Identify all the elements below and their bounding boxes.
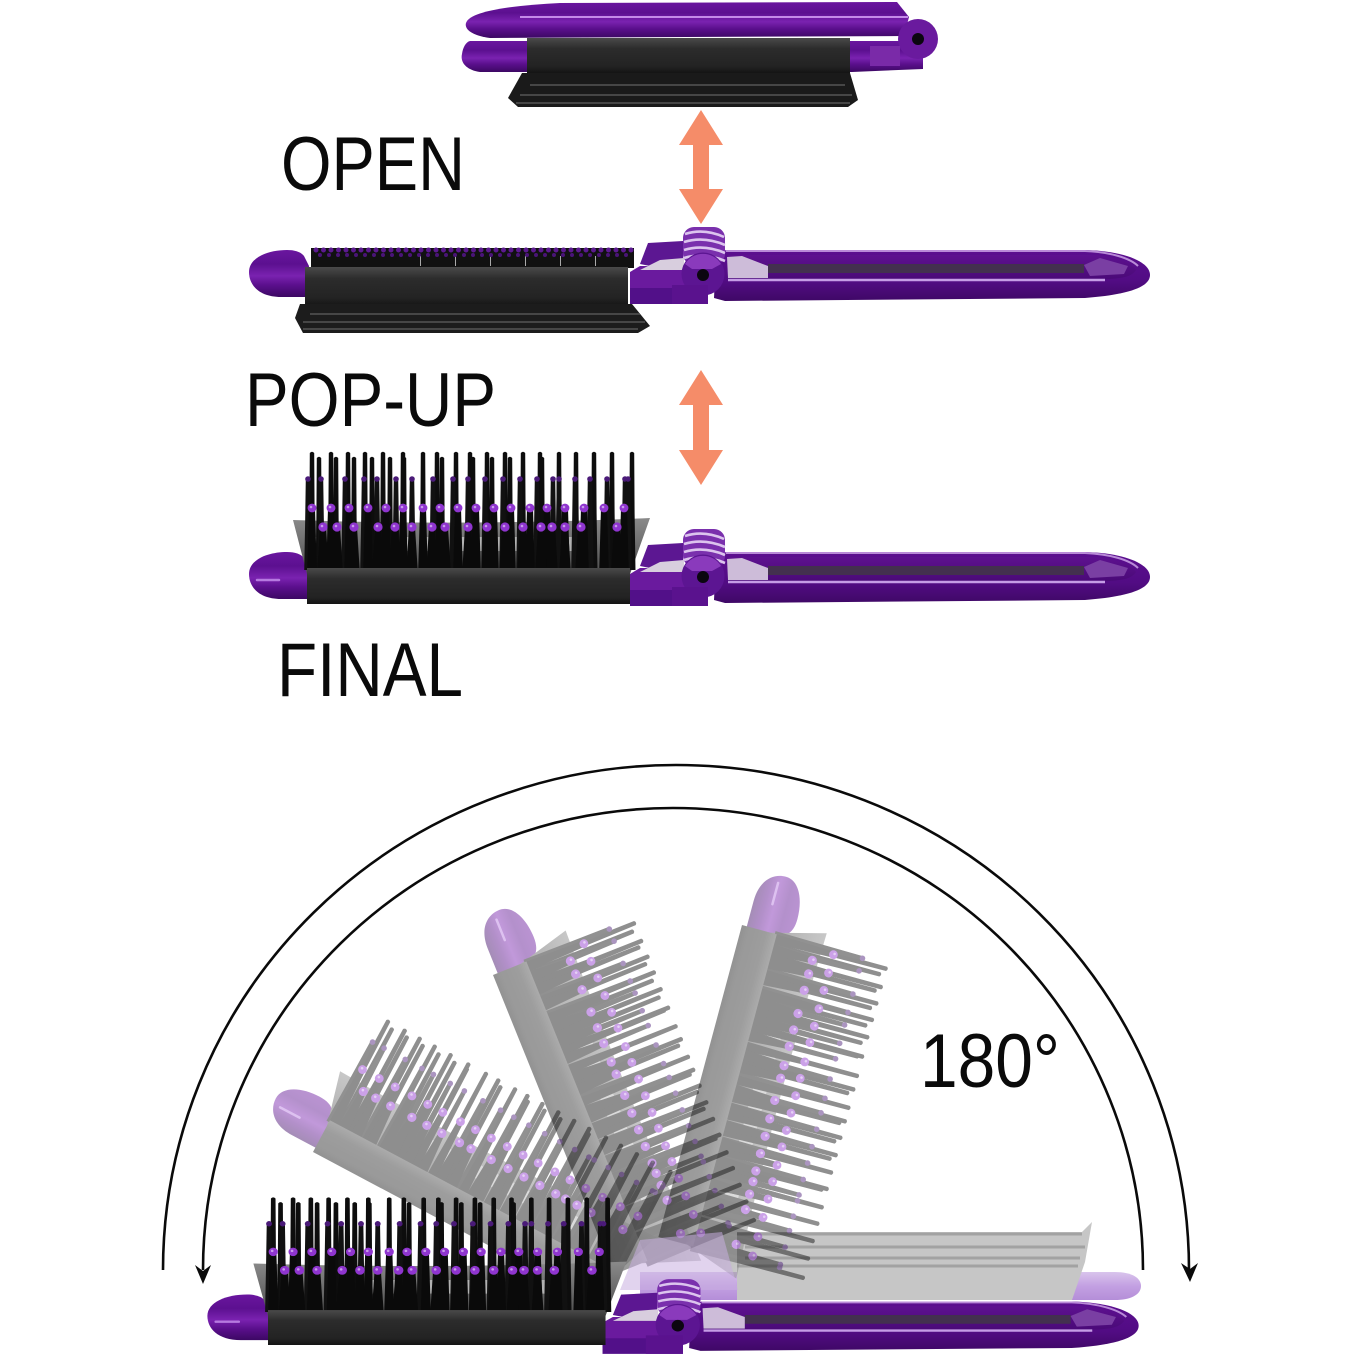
ghost folded plate — [737, 1222, 1092, 1300]
ghost brush: steep right — [653, 869, 904, 1296]
ghost brush: low left — [262, 990, 687, 1313]
rotation arc: inner arrow — [195, 808, 1143, 1284]
brush final: bristles up — [249, 452, 1150, 606]
ghost ridges — [737, 1234, 1085, 1266]
ghost brush: folded flat on right — [640, 1222, 1141, 1300]
right arm and hinge — [630, 529, 1150, 606]
top handle — [466, 2, 909, 38]
brush head with handle — [249, 452, 650, 604]
top handle highlight — [520, 16, 908, 18]
label FINAL: FINAL — [277, 628, 463, 713]
ghost handle — [640, 1272, 1141, 1300]
right arm and hinge — [603, 1279, 1139, 1354]
brush head with handle — [207, 1197, 626, 1345]
rotation arc: outer arrow — [163, 765, 1198, 1282]
left handle loop — [249, 250, 309, 297]
arrow: pop-up to final — [679, 370, 723, 485]
brush closed: open state — [462, 2, 938, 107]
label 180 degrees: 180° — [920, 1019, 1060, 1104]
folded plate — [295, 304, 650, 333]
plate ridges — [303, 314, 645, 329]
label POP-UP: POP-UP — [245, 358, 496, 443]
folded bristle strip — [311, 248, 634, 268]
closed plate — [508, 73, 858, 107]
arrow: open to pop-up — [679, 110, 723, 224]
right arm and hinge — [630, 227, 1150, 304]
ghost hub fan near hinge — [620, 1232, 738, 1290]
folded band — [305, 267, 628, 306]
plate ridges — [516, 85, 852, 103]
rotating brush: solid at bottom — [207, 1197, 1139, 1354]
closed band — [527, 38, 850, 73]
ghost brush: steep left — [471, 864, 763, 1293]
hinge hub — [870, 19, 938, 66]
label OPEN: OPEN — [281, 122, 465, 207]
lower handle — [462, 41, 923, 72]
brush open flat: bristles folded — [249, 227, 1150, 333]
